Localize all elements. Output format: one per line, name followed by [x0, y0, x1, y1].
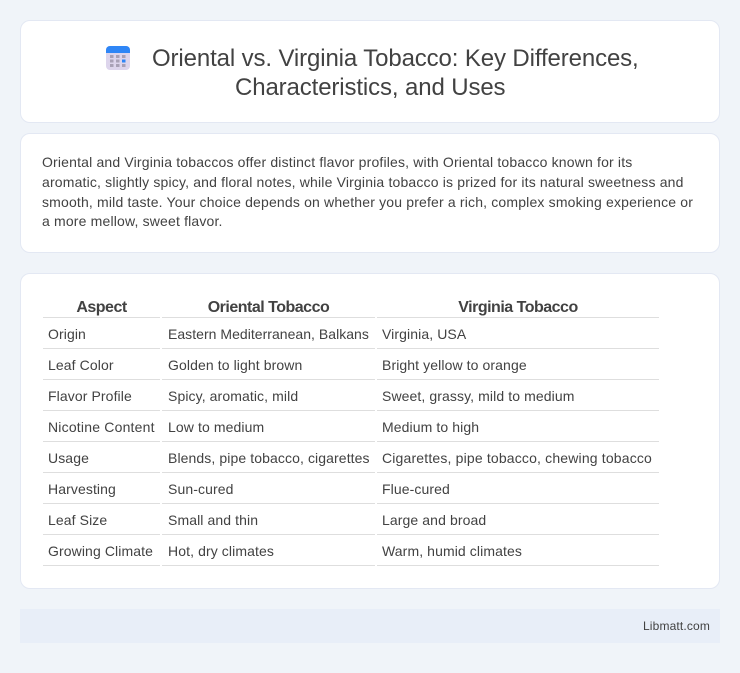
table rows: Bright yellow to orange	[382, 357, 527, 373]
table rows: Low to medium	[168, 419, 264, 435]
table rows: Growing Climate	[48, 543, 153, 559]
table rows: Usage	[48, 450, 89, 466]
table rows: Leaf Color	[48, 357, 114, 373]
table rows: Nicotine Content	[48, 419, 155, 435]
table rows	[43, 317, 659, 566]
text: intro paragraph: aromatic, slightly spicy, and floral notes, while Virginia tobacco is prized for its natural sweetness and	[42, 174, 684, 190]
text: intro paragraph: Oriental and Virginia tobaccos offer distinct flavor profiles, with Oriental tobacco known for its	[42, 154, 632, 170]
table rows: Flavor Profile	[48, 388, 132, 404]
table header: Virginia Tobacco	[458, 299, 578, 316]
table rows: Origin	[48, 326, 86, 342]
table rows: Hot, dry climates	[168, 543, 274, 559]
text: intro paragraph	[42, 154, 693, 229]
table rows: Small and thin	[168, 512, 258, 528]
table rows: Harvesting	[48, 481, 116, 497]
table rows: Blends, pipe tobacco, cigarettes	[168, 450, 370, 466]
panel: introduction	[20, 133, 720, 253]
table rows: Flue-cured	[382, 481, 450, 497]
panel: header	[20, 20, 720, 123]
panel: comparison table	[20, 273, 720, 589]
table rows: Large and broad	[382, 512, 486, 528]
table header: Oriental Tobacco	[208, 299, 329, 316]
text: intro paragraph: smooth, mild taste. Your choice depends on whether you prefer a rich, complex smoking experience or	[42, 194, 693, 210]
table rows: Cigarettes, pipe tobacco, chewing tobacco	[382, 450, 652, 466]
table rows: Virginia, USA	[382, 326, 466, 342]
table header	[76, 299, 578, 316]
table rows: Leaf Size	[48, 512, 107, 528]
text: footer credit: Libmatt.com	[643, 619, 710, 633]
icon: calendar	[106, 46, 130, 70]
table rows: Medium to high	[382, 419, 479, 435]
table rows: Sun-cured	[168, 481, 234, 497]
table rows: Sweet, grassy, mild to medium	[382, 388, 574, 404]
title: Oriental vs. Virginia Tobacco: Key Differences,	[152, 45, 639, 72]
title	[152, 45, 639, 101]
title: Characteristics, and Uses	[235, 74, 505, 101]
table rows: Golden to light brown	[168, 357, 302, 373]
table header: Aspect	[76, 299, 127, 316]
table rows: Spicy, aromatic, mild	[168, 388, 298, 404]
footer bar	[20, 609, 720, 643]
table rows: Warm, humid climates	[382, 543, 522, 559]
text: intro paragraph: a more mellow, sweet flavor.	[42, 213, 223, 229]
table rows: Eastern Mediterranean, Balkans	[168, 326, 369, 342]
